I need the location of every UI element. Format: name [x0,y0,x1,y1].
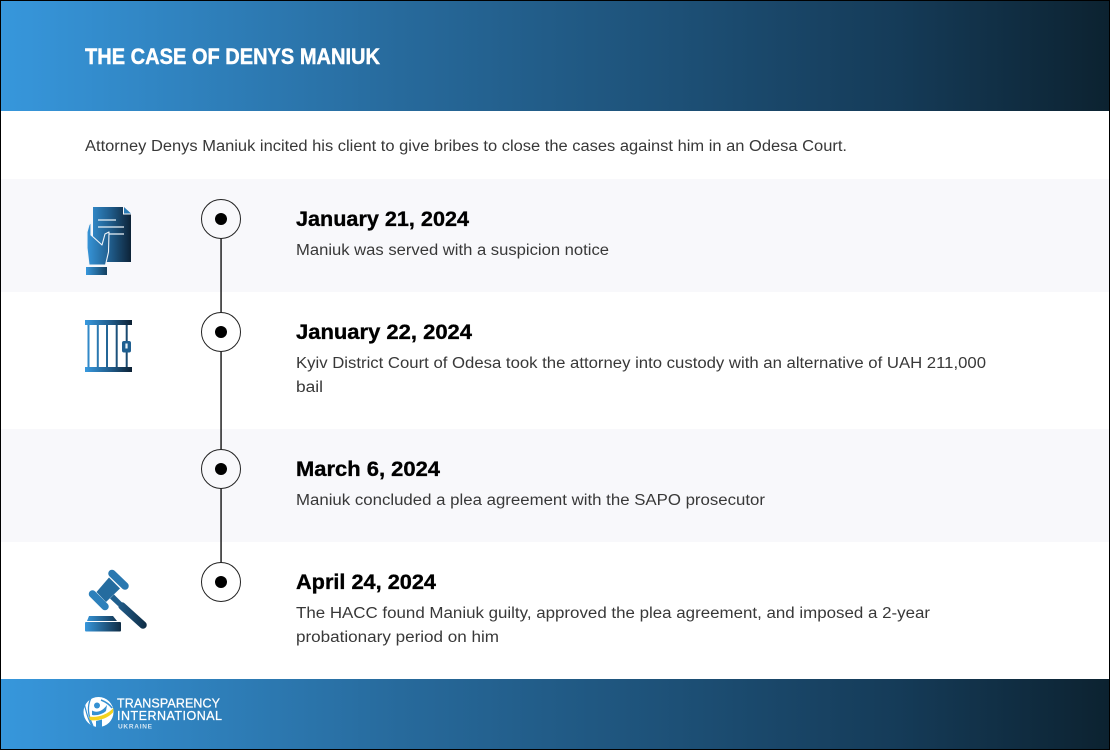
timeline [202,200,240,602]
event: April 24: The HACC found Maniuk guilty, approved the plea agreement, and imposed a 2-year [296,605,930,622]
event: April 24: April 24, 2024 [296,571,436,594]
footer banner [0,679,1110,750]
icon: hand holding document [86,207,131,275]
event: January 21: January 21, 2024 [296,208,469,231]
event: March 6: March 6, 2024 [296,458,440,481]
timeline marker: March 6 [202,450,240,488]
logo: Transparency International Ukraine [84,696,222,730]
intro text: Attorney Denys Maniuk incited his client to give bribes to close the cases against him in an Odesa Court. [85,138,847,155]
timeline marker: April 24 [202,562,240,602]
icon: judge gavel [85,574,143,632]
event: January 22: January 22, 2024 [296,321,472,344]
event: April 24 [296,571,930,646]
row background: March 6 [0,429,1110,542]
timeline marker: January 21 [202,200,240,238]
event: January 22 [296,321,986,396]
event: March 6: Maniuk concluded a plea agreement with the SAPO prosecutor [296,492,765,509]
icon: jail bars [85,320,132,372]
timeline marker: January 22 [202,312,240,352]
event: April 24: probationary period on him [296,629,499,646]
logo: Transparency International Ukraine: INTERNATIONAL [117,709,222,723]
header banner [0,0,1110,111]
event: January 22: bail [296,379,323,396]
logo: Transparency International Ukraine: UKRAINE [118,724,153,730]
logo: Transparency International Ukraine: TRANSPARENCY [117,696,221,710]
event: January 21 [296,208,609,259]
row background: January 21 [0,179,1110,292]
event: January 21: Maniuk was served with a suspicion notice [296,242,609,259]
title: THE CASE OF DENYS MANIUK [85,44,380,69]
event: March 6 [296,458,765,509]
event: January 22: Kyiv District Court of Odesa took the attorney into custody with an alternative of UAH 211,000 [296,355,986,372]
